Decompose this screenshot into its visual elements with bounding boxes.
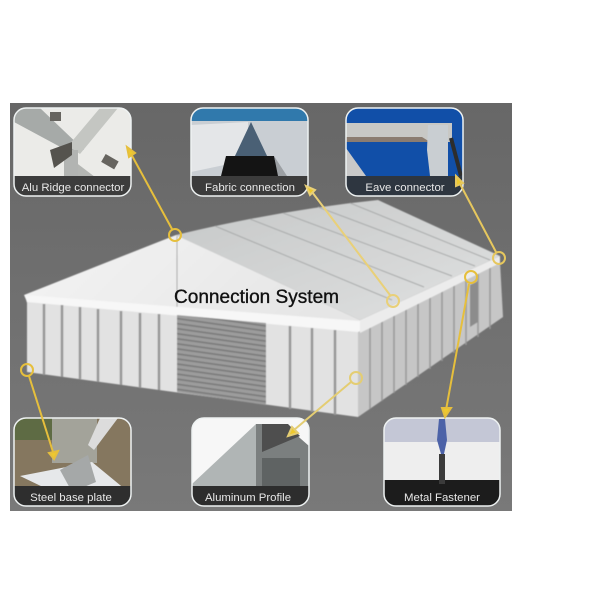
card: Steel base plate — [14, 418, 131, 506]
card: Aluminum Profile — [192, 418, 309, 506]
side door — [470, 281, 478, 327]
arrow: fabric — [306, 186, 399, 307]
building — [24, 200, 503, 417]
card: Steel base plate: Steel base plate — [30, 492, 112, 504]
card: Metal Fastener — [384, 418, 500, 506]
card borders — [14, 108, 500, 506]
arrow: base plate — [21, 364, 58, 459]
card: Fabric connection: Fabric connection — [205, 182, 295, 194]
card: Eave connector: Eave connector — [365, 182, 445, 194]
arrow: ridge — [127, 147, 181, 241]
card: Aluminum Profile: Aluminum Profile — [205, 492, 291, 504]
arrows — [21, 147, 505, 459]
infographic: connection system — [10, 103, 512, 511]
arrow: fastener — [442, 271, 477, 417]
card: Alu Ridge connector: Alu Ridge connector — [22, 182, 124, 194]
card: Eave connector — [346, 108, 463, 196]
roof side — [176, 200, 500, 320]
front gable — [24, 235, 360, 332]
arrow: profile — [288, 372, 362, 436]
background panel — [10, 103, 512, 511]
roller door — [177, 315, 266, 405]
card: Fabric connection — [191, 108, 308, 196]
title: Connection System — [174, 287, 339, 308]
front wall — [27, 302, 358, 417]
arrow: eave — [456, 176, 505, 264]
card: Alu Ridge connector — [14, 108, 131, 196]
card: Metal Fastener: Metal Fastener — [404, 492, 480, 504]
side wall — [358, 262, 503, 417]
